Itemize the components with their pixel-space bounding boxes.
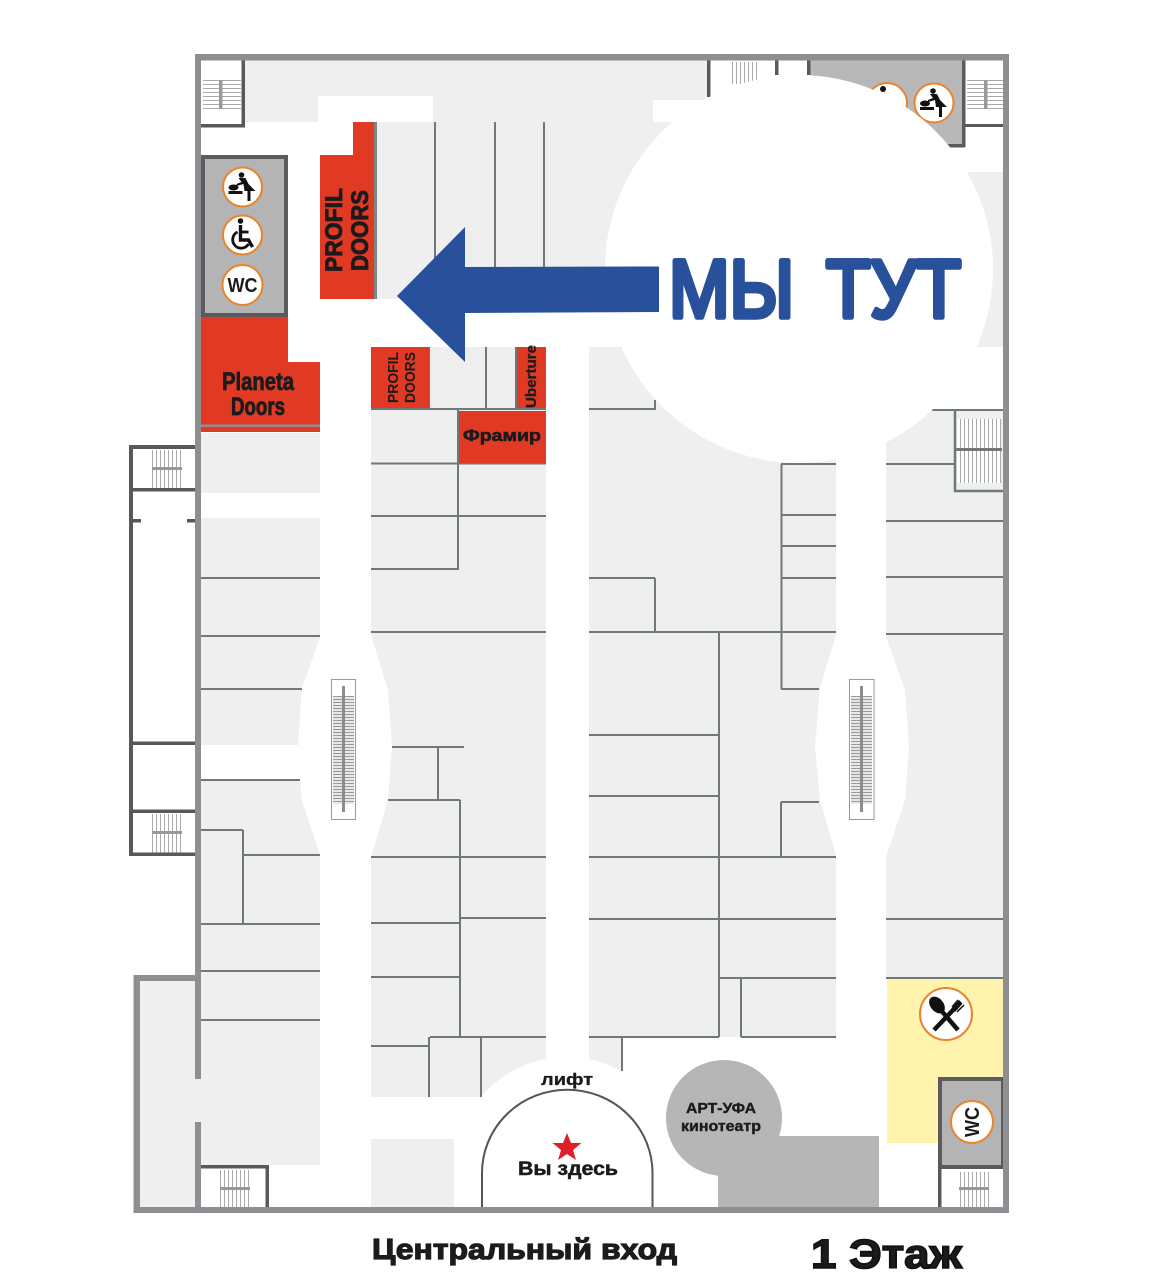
red store: Planeta Doors: Planeta bbox=[222, 368, 295, 396]
lift arch bbox=[482, 1070, 652, 1207]
icon: WC rotated: WC bbox=[962, 1107, 984, 1137]
icon: baby changing bbox=[223, 168, 262, 206]
red store: Profil Doors small: PROFIL bbox=[385, 352, 402, 403]
restaurant zone bbox=[887, 979, 1003, 1143]
icon: baby changing top right bbox=[914, 84, 954, 122]
restroom block top right bbox=[810, 60, 966, 148]
red store: Planeta Doors: Doors bbox=[231, 393, 285, 421]
escalator left bbox=[332, 680, 356, 820]
red store: Profil Doors small: DOORS bbox=[402, 352, 419, 403]
arrow bbox=[397, 227, 659, 362]
icon: WC bbox=[222, 265, 262, 305]
cinema label bbox=[681, 1100, 761, 1135]
escalator right bbox=[850, 680, 874, 820]
you are here label: Вы здесь bbox=[518, 1159, 618, 1180]
floor plan background bbox=[140, 60, 1003, 1280]
restroom block bottom right bbox=[940, 1079, 1003, 1167]
cinema label: АРТ-УФА bbox=[686, 1100, 756, 1117]
outer walls dark bbox=[129, 60, 1003, 1207]
cinema block bbox=[666, 1060, 879, 1207]
building outer wall bbox=[134, 54, 1009, 1213]
red store: Profil Doors small bbox=[371, 347, 429, 408]
red store: Planeta Doors bbox=[201, 317, 320, 432]
callout text: ТУТ bbox=[826, 244, 961, 335]
red store: Profil Doors large bbox=[320, 122, 377, 299]
red store: Framir: Фрамир bbox=[463, 426, 541, 445]
floor label: 1 Этаж bbox=[811, 1231, 963, 1277]
restroom block left bbox=[203, 157, 286, 315]
icon: red star bbox=[552, 1133, 582, 1160]
central entrance label: Центральный вход bbox=[372, 1234, 677, 1266]
interior partition lines bbox=[201, 122, 1003, 1097]
red store: Framir bbox=[459, 411, 546, 463]
white callout circle bbox=[605, 75, 993, 463]
stairs and outer annex walls bbox=[152, 62, 1003, 1207]
lift label: лифт bbox=[541, 1070, 593, 1089]
callout text: МЫ bbox=[669, 244, 794, 335]
red store: Profil Doors large: DOORS bbox=[347, 190, 374, 271]
callout text bbox=[669, 244, 961, 335]
icon: cutlery bbox=[920, 988, 972, 1040]
red store: Uberture bbox=[517, 345, 546, 408]
red store: Profil Doors large: PROFIL bbox=[321, 188, 348, 272]
icon: WC: WC bbox=[228, 275, 258, 297]
red store: Uberture: Uberture bbox=[523, 345, 540, 408]
cinema label: кинотеатр bbox=[681, 1118, 761, 1135]
icon: wheelchair bbox=[223, 216, 262, 254]
